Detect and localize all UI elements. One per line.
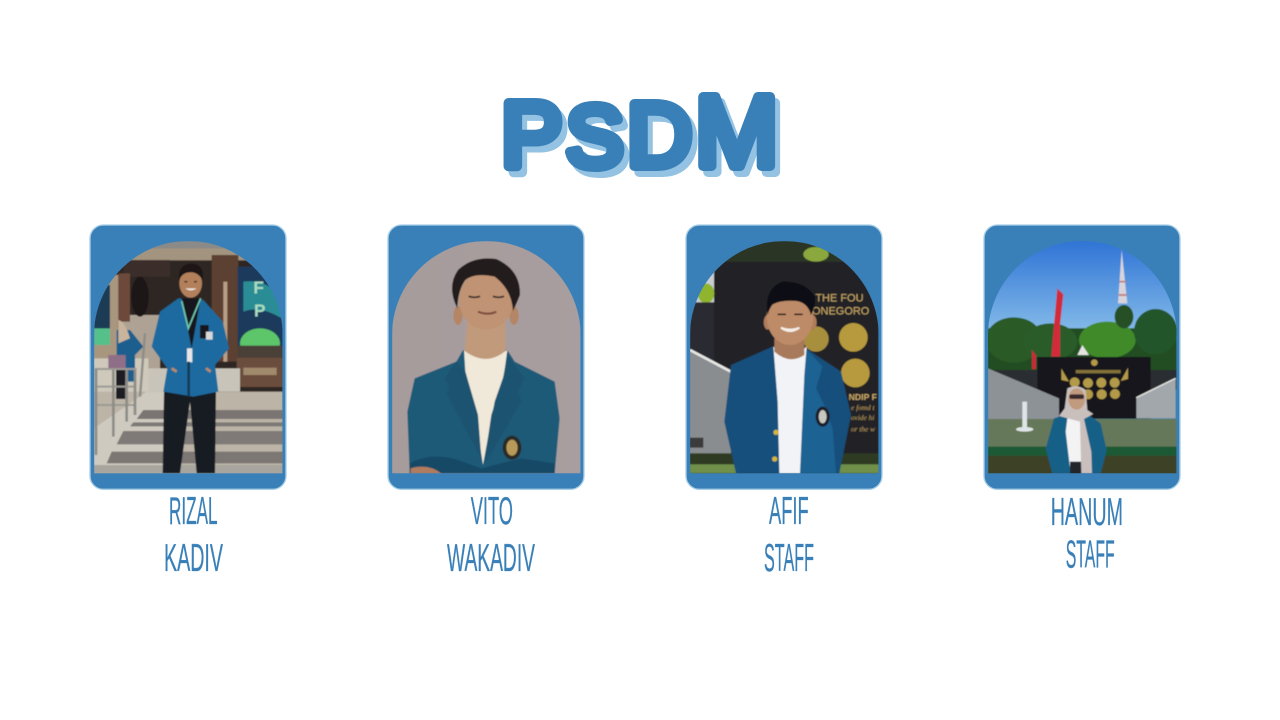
- photo: Rizal standing in front of building: P: [254, 301, 266, 321]
- panel: Hanum photo card: [984, 225, 1180, 489]
- name label: Afif, Staff: AFIF: [769, 490, 809, 533]
- name label: Vito, Wakadiv: [447, 490, 535, 580]
- name label: Rizal, Kadiv: [164, 490, 223, 580]
- panel: Afif photo card: [686, 225, 882, 489]
- text: STAFF: [764, 537, 814, 580]
- panel: Rizal photo card: [90, 225, 286, 489]
- photo: Hanum in front of fountain monument: [986, 241, 1177, 474]
- photo: Afif in front of monument: or the w: [851, 425, 875, 434]
- name label: Hanum, Staff: [1051, 491, 1123, 577]
- text: STAFF: [1066, 534, 1115, 577]
- text: RIZAL: [169, 490, 218, 533]
- photo: Afif in front of monument: [690, 241, 879, 474]
- panel: Vito photo card: [388, 225, 584, 489]
- photo: Rizal standing in front of building: F: [253, 277, 264, 297]
- title: D: [627, 86, 692, 186]
- photo: Afif in front of monument: THE FOU: [815, 293, 864, 305]
- name label: Rizal, Kadiv: KADIV: [164, 537, 223, 580]
- photo: Afif in front of monument: NDIP F: [849, 392, 877, 402]
- name label: Afif, Staff: [764, 490, 814, 580]
- name label: Vito, Wakadiv: VITO: [471, 490, 513, 533]
- photo: Afif in front of monument: ovide hi: [851, 413, 874, 422]
- photo: Afif in front of monument: ONEGORO: [812, 305, 870, 317]
- photo: Rizal standing in front of building: [94, 241, 283, 475]
- photo: Vito portrait: [392, 241, 581, 474]
- text: WAKADIV: [447, 537, 535, 580]
- title: S: [566, 89, 623, 185]
- photo: Afif in front of monument: e fomd t: [851, 403, 876, 412]
- title: M: [695, 76, 778, 188]
- name label: Hanum, Staff: HANUM: [1051, 491, 1123, 534]
- title: P: [501, 84, 562, 186]
